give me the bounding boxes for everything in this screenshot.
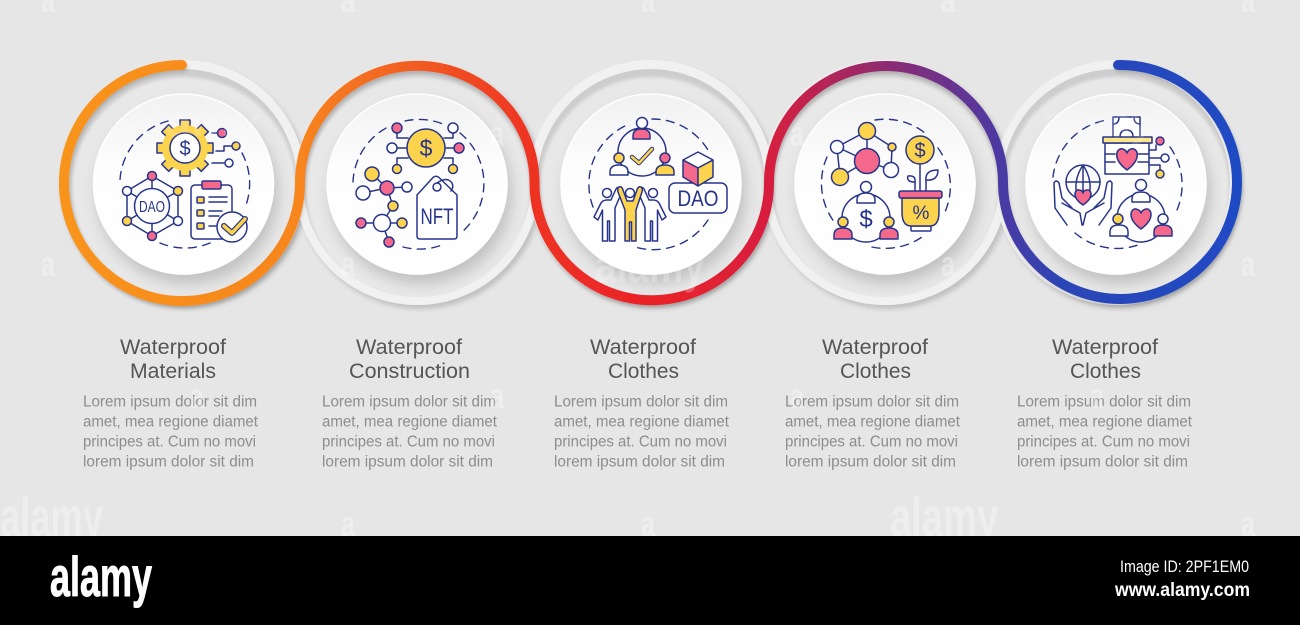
icon: network, plant pot and community funds: $	[859, 206, 873, 233]
panel: column 4 text	[785, 336, 961, 470]
panel: column 3 text: Clothes	[608, 360, 679, 383]
icon: gear, DAO network and checklist: DAO	[139, 199, 165, 216]
panel: column 1 text: Waterproof	[120, 336, 226, 359]
panel: column 3 text: lorem ipsum dolor sit dim	[554, 454, 725, 470]
panel: column 3 text: Lorem ipsum dolor sit dim	[554, 394, 728, 410]
stock watermarks: alamy	[125, 98, 261, 145]
stock watermarks: a	[341, 503, 356, 544]
stock watermarks: a	[341, 243, 356, 284]
panel: column 5 text	[1017, 336, 1193, 470]
panel: column 5 text: principes at. Cum no movi	[1017, 434, 1190, 450]
panel: column 4 text: Waterproof	[822, 336, 928, 359]
icon: DAO team with cube: DAO	[678, 186, 718, 211]
stock watermarks: a	[790, 113, 805, 154]
panel: column 4 text: Clothes	[840, 360, 911, 383]
footer bar	[0, 536, 1300, 625]
stock watermarks: a	[641, 503, 656, 544]
icon: NFT tag and coin network: NFT	[420, 204, 454, 229]
panel: column 2 text: Lorem ipsum dolor sit dim	[322, 394, 496, 410]
panel: column 3 text: principes at. Cum no movi	[554, 434, 727, 450]
stock watermarks: a	[490, 375, 505, 416]
panel: column 1 text: amet, mea regione diamet	[83, 414, 259, 430]
stock watermarks: a	[1241, 503, 1256, 544]
footer bar: Image ID: 2PF1EM0	[1120, 557, 1249, 576]
icon: NFT tag and coin network	[353, 119, 484, 249]
icon: DAO team with cube	[589, 118, 727, 250]
panel: column 2 text: Construction	[349, 360, 470, 383]
stock watermarks: alamy	[0, 486, 103, 548]
panel: column 1 text: principes at. Cum no movi	[83, 434, 256, 450]
icon: NFT tag and coin network: $	[420, 135, 433, 161]
panel: column 2 text	[322, 336, 498, 470]
panel: column 2 text: lorem ipsum dolor sit dim	[322, 454, 493, 470]
stock watermarks: a	[1241, 243, 1256, 284]
icon: network, plant pot and community funds	[821, 119, 950, 248]
stock watermarks: alamy	[1042, 98, 1153, 145]
continuous gradient ribbon	[64, 65, 1237, 301]
footer bar: www.alamy.com	[1114, 580, 1250, 601]
panel: white discs	[94, 94, 1206, 274]
icon: gear, DAO network and checklist: $	[179, 138, 191, 160]
panel: outer rings	[60, 60, 1240, 305]
stock watermarks: a	[490, 113, 505, 154]
panel: column 4 text: lorem ipsum dolor sit dim	[785, 454, 956, 470]
panel: column 4 text: principes at. Cum no movi	[785, 434, 958, 450]
panel: column 1 text	[83, 336, 259, 470]
icon: network, plant pot and community funds: $	[914, 140, 926, 162]
panel: column 5 text: lorem ipsum dolor sit dim	[1017, 454, 1188, 470]
panel: column 2 text: Waterproof	[356, 336, 462, 359]
panel: column 4 text: Lorem ipsum dolor sit dim	[785, 394, 959, 410]
icon: gear, DAO network and checklist	[120, 120, 250, 248]
panel: column 1 text: lorem ipsum dolor sit dim	[83, 454, 254, 470]
stock watermarks: a	[790, 375, 805, 416]
stock watermarks: a	[41, 243, 56, 284]
panel: column 3 text	[554, 336, 730, 470]
stock watermarks: alamy	[890, 486, 998, 548]
panel: column 1 text: Materials	[130, 360, 216, 383]
panel: column 2 text: principes at. Cum no movi	[322, 434, 495, 450]
panel: column 2 text: amet, mea regione diamet	[322, 414, 498, 430]
stock watermarks: a	[941, 243, 956, 284]
panel: column 3 text: amet, mea regione diamet	[554, 414, 730, 430]
stock watermarks: a	[190, 375, 205, 416]
panel: column 1 text: Lorem ipsum dolor sit dim	[83, 394, 257, 410]
panel: column 5 text: Waterproof	[1052, 336, 1158, 359]
panel: column 5 text: amet, mea regione diamet	[1017, 414, 1193, 430]
panel: column 5 text: Clothes	[1070, 360, 1141, 383]
icon: donation box, globe in hands and community heart	[1053, 117, 1182, 248]
icon: network, plant pot and community funds: %	[913, 203, 930, 224]
panel: column 3 text: Waterproof	[590, 336, 696, 359]
footer bar: alamy	[50, 545, 152, 608]
stock watermarks: a	[1090, 375, 1105, 416]
stock watermarks: alamy	[595, 237, 705, 293]
panel: column 4 text: amet, mea regione diamet	[785, 414, 961, 430]
panel: column 5 text: Lorem ipsum dolor sit dim	[1017, 394, 1191, 410]
